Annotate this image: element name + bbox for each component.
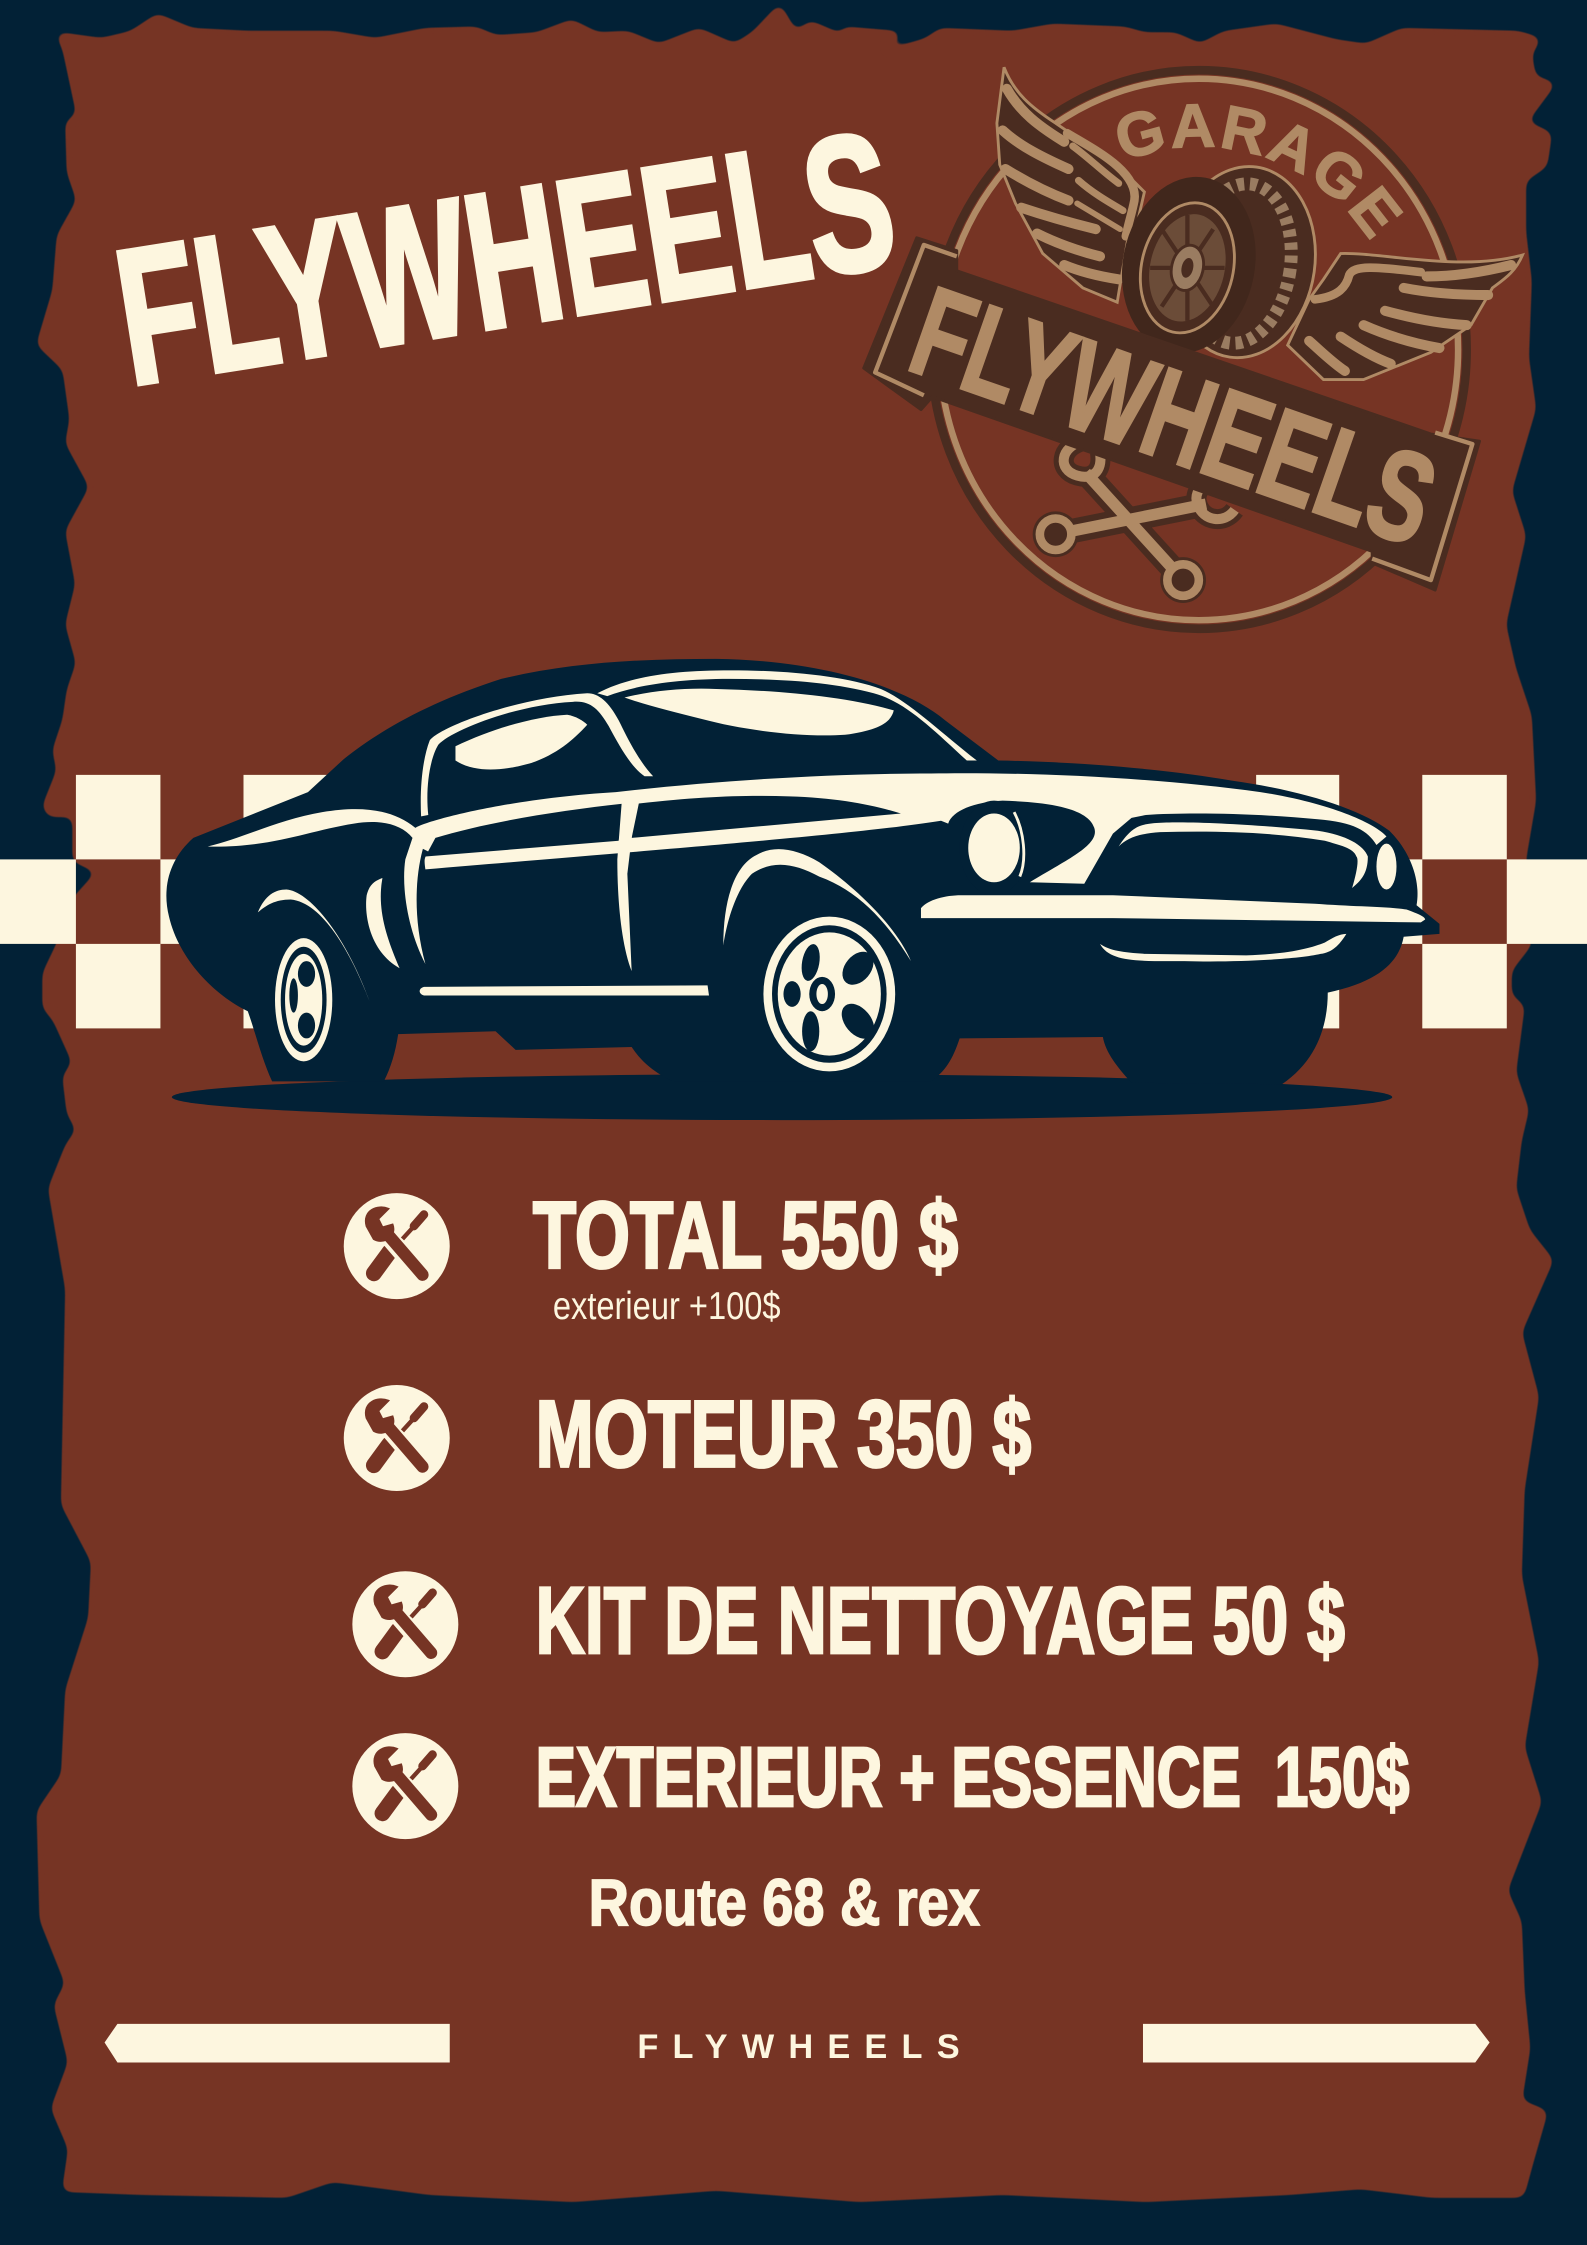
rear shoulder and hood [208, 773, 1386, 884]
left wing [997, 67, 1144, 302]
bumper [921, 895, 1425, 922]
list item: total [344, 1183, 958, 1299]
rear arch [258, 889, 370, 1001]
footer bar right [1143, 2024, 1490, 2063]
list item: exterior and fuel [352, 1730, 1409, 1839]
rear wheel [275, 938, 332, 1061]
address: Route 68 & rex [589, 1865, 980, 1939]
grille trim [1119, 822, 1368, 888]
side marker light [1376, 844, 1397, 889]
side window frame [421, 693, 653, 816]
crossed wrenches [1033, 441, 1235, 603]
front arch [723, 849, 911, 961]
note: exterior surcharge: exterieur +100$ [553, 1285, 781, 1328]
icon: tools [352, 1571, 458, 1677]
wheel [1107, 157, 1328, 367]
icon: tools [352, 1733, 458, 1839]
side glass shape B [632, 796, 901, 838]
banner [864, 238, 1480, 590]
footer bar left [105, 2024, 450, 2063]
lower valance [1100, 934, 1346, 961]
checkered flag band [0, 775, 1587, 1028]
door line [617, 802, 636, 971]
footer brand: FLYWHEELS [637, 2028, 960, 2066]
side window [455, 715, 587, 770]
garage logo [862, 66, 1525, 634]
icon: tools [344, 1193, 450, 1299]
hip line [404, 838, 425, 964]
list item: engine [344, 1382, 1031, 1491]
right wing [1288, 253, 1523, 380]
logo ring [931, 70, 1467, 629]
list item: cleaning kit [352, 1568, 1345, 1677]
price: total: TOTAL 550 $ [533, 1183, 958, 1289]
front wheel [763, 917, 895, 1071]
price: engine: MOTEUR 350 $ [536, 1382, 1031, 1488]
side glass shape A [425, 804, 624, 857]
windshield [624, 689, 894, 735]
car [166, 659, 1439, 1084]
car shadow [172, 1074, 1392, 1120]
rear crease [366, 878, 400, 968]
car silhouette [166, 659, 1439, 1084]
logo arc text: GARAGE [1117, 104, 1404, 240]
roof line [597, 670, 977, 761]
headlight [960, 801, 1028, 895]
sill [420, 985, 709, 995]
icon: tools [344, 1385, 450, 1491]
title: FLYWHEELS [103, 90, 908, 426]
